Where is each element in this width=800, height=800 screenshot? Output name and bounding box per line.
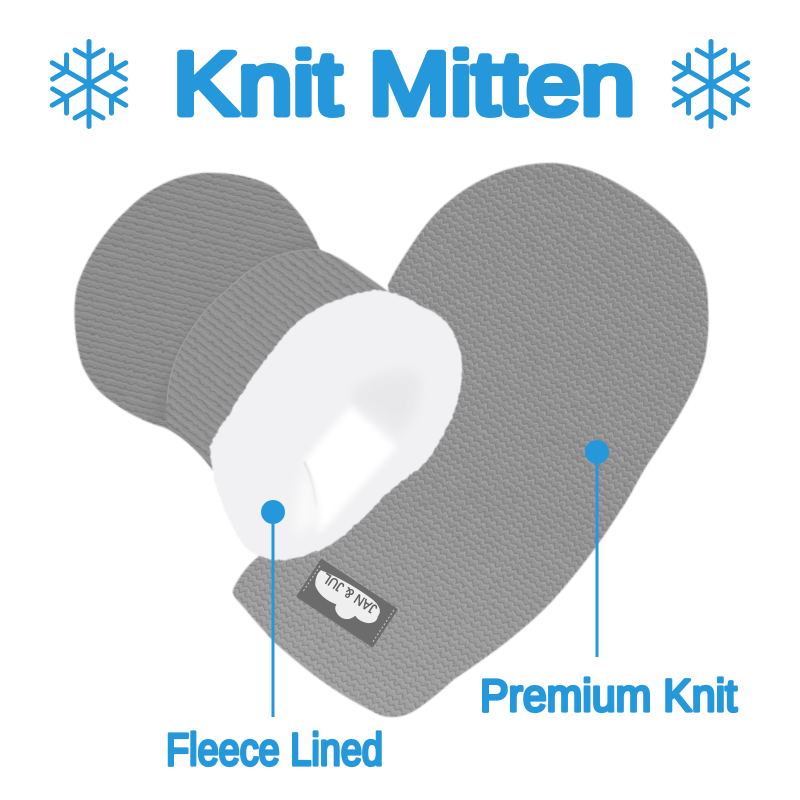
cuff: [166, 249, 389, 470]
icon: right snowflake: [667, 42, 755, 126]
woven brand label: [296, 558, 398, 648]
pointer dot: [585, 440, 609, 464]
pointer dot: [261, 500, 285, 524]
callout: fleece lined: [166, 500, 383, 775]
title: Knit Mitten: [173, 34, 635, 133]
mitten illustration: [74, 162, 710, 718]
fleece lining: [210, 290, 462, 560]
callout: premium knit: [480, 440, 737, 721]
fleece inner opening: [303, 405, 397, 535]
label text: Premium Knit: [480, 670, 737, 721]
pointer line: [272, 512, 274, 717]
pointer line: [596, 452, 598, 657]
label text: JAN & JUL: [319, 570, 380, 618]
label stitching: [300, 563, 394, 643]
label cloud: [305, 566, 385, 634]
icon: left snowflake: [45, 42, 133, 126]
label text: Fleece Lined: [166, 724, 383, 775]
mitten hand body: [232, 162, 710, 718]
thumb: [74, 172, 324, 470]
